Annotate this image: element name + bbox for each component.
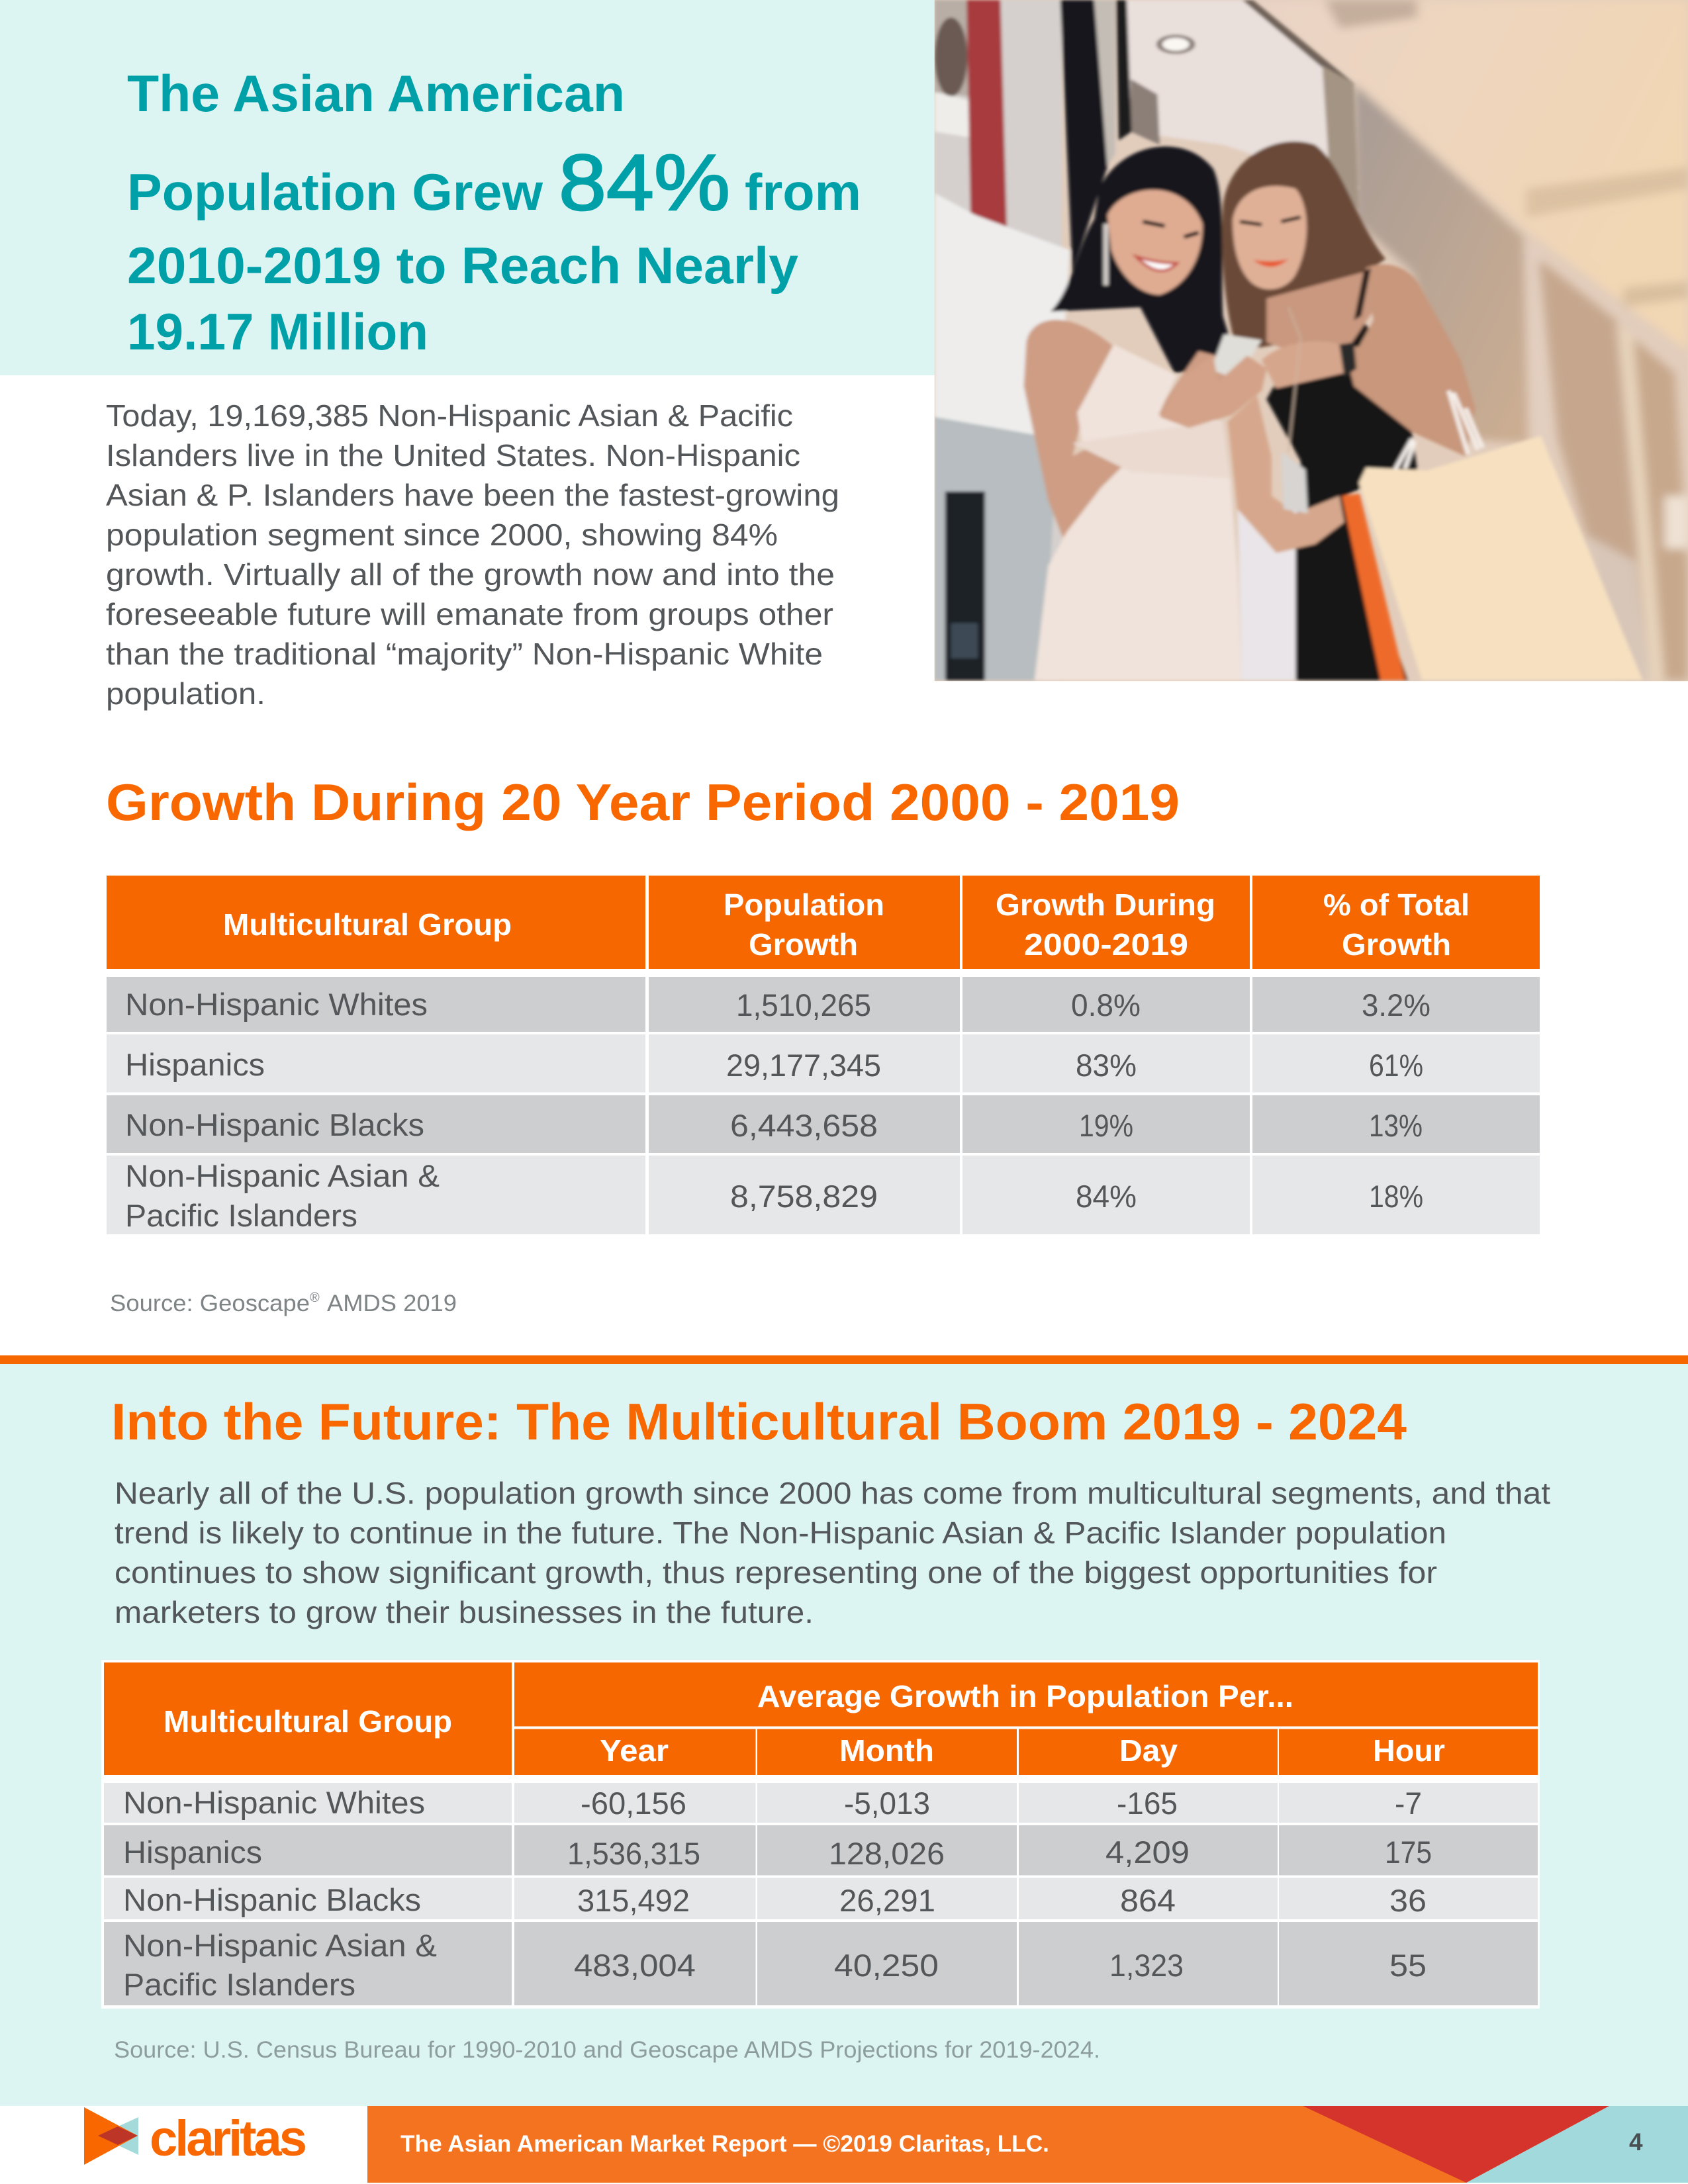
right woman shoulder and arm [1344, 264, 1476, 457]
intro paragraph: population segment since 2000, showing 84% [106, 518, 778, 552]
row: Hispanics [107, 1034, 1540, 1092]
row: Non-Hispanic Whites: 3.2% [1362, 987, 1430, 1023]
title: 19.17 Million [127, 302, 428, 361]
row: Non-Hispanic Blacks: 26,291 [839, 1883, 935, 1918]
row: Hispanics: 1,536,315 [567, 1836, 700, 1871]
table header: Day [1119, 1733, 1178, 1768]
row: Hispanics: 29,177,345 [726, 1048, 881, 1083]
row: Non-Hispanic Asian and Pacific Islanders: Non-Hispanic Asian & [125, 1158, 440, 1193]
paragraph: multicultural growth: continues to show significant growth, thus representing one of the biggest opportunities for [115, 1555, 1437, 1590]
table header: Average Growth in Population Per... [757, 1679, 1293, 1713]
title [127, 64, 861, 361]
row: Non-Hispanic Asian and Pacific Islanders: Pacific Islanders [123, 1967, 355, 2002]
table: average growth per period [101, 1660, 1540, 2009]
row: Hispanics: 175 [1385, 1835, 1432, 1870]
row: Non-Hispanic Whites: 0.8% [1071, 987, 1141, 1023]
title: The Asian American [127, 64, 625, 122]
table header: Multicultural Group [164, 1704, 452, 1739]
table header row: Growth [1342, 927, 1451, 962]
heading: growth during 20 year period: Growth During 20 Year Period 2000 - 2019 [106, 773, 1180, 831]
logo wordmark: claritas [150, 2111, 307, 2167]
right woman fist [1262, 341, 1344, 388]
row: Non-Hispanic Asian and Pacific Islanders: 84% [1076, 1179, 1137, 1214]
row: Non-Hispanic Asian and Pacific Islanders: 8,758,829 [730, 1179, 878, 1214]
table header: Year [600, 1733, 669, 1768]
intro paragraph: Asian & P. Islanders have been the fastest-growing [106, 478, 839, 512]
footer [0, 2106, 1688, 2184]
left woman arm and shoulder [1022, 318, 1226, 537]
table header row: Growth [749, 927, 858, 962]
intro paragraph: population. [106, 676, 265, 711]
source note: Geoscape: AMDS 2019 [327, 1291, 457, 1316]
row: Non-Hispanic Asian and Pacific Islanders: 483,004 [574, 1948, 696, 1983]
row: Non-Hispanic Blacks: 36 [1389, 1883, 1427, 1918]
title: Population Grew [127, 163, 543, 221]
footer bar [367, 2106, 1688, 2183]
table: growth 2000-2019 [107, 876, 1540, 1234]
row: Non-Hispanic Asian and Pacific Islanders: Pacific Islanders [125, 1198, 357, 1233]
bags [1342, 494, 1405, 680]
paragraph: multicultural growth: marketers to grow their businesses in the future. [115, 1595, 814, 1629]
phone [1211, 334, 1262, 380]
row: Non-Hispanic Blacks: 13% [1369, 1108, 1423, 1143]
table header: Month [839, 1733, 934, 1768]
left woman second arm [1228, 395, 1344, 553]
source note: Geoscape: ® [310, 1291, 320, 1305]
row: Non-Hispanic Asian and Pacific Islanders: 18% [1369, 1179, 1423, 1214]
row: Non-Hispanic Whites: -5,013 [844, 1786, 930, 1821]
intro paragraph: foreseeable future will emanate from groups other [106, 597, 833, 631]
row: Non-Hispanic Whites [107, 977, 1540, 1032]
row: Non-Hispanic Asian and Pacific Islanders [104, 1922, 1538, 2005]
row: Hispanics [104, 1825, 1538, 1876]
photo: two women shopping looking at a phone [927, 0, 1688, 688]
row: Non-Hispanic Blacks: 315,492 [577, 1883, 690, 1918]
intro paragraph: growth. Virtually all of the growth now and into the [106, 557, 835, 592]
row: Hispanics: Hispanics [123, 1835, 262, 1870]
row: Non-Hispanic Asian and Pacific Islanders: 55 [1389, 1948, 1427, 1983]
row: Non-Hispanic Asian and Pacific Islanders [107, 1156, 1540, 1234]
left woman hair [1051, 146, 1237, 373]
row: Hispanics: 128,026 [829, 1836, 945, 1871]
row: Non-Hispanic Blacks: Non-Hispanic Blacks [123, 1882, 421, 1917]
table header row: % of Total [1323, 887, 1470, 922]
row: Non-Hispanic Blacks: 6,443,658 [730, 1108, 878, 1143]
intro paragraph: Today, 19,169,385 Non-Hispanic Asian & Pacific [106, 398, 793, 433]
icon: Claritas logo mark [84, 2107, 138, 2165]
source note: Geoscape: Source: Geoscape [110, 1291, 310, 1316]
left woman face [1107, 190, 1203, 295]
table header [104, 1662, 1538, 1775]
page number: 4 [1629, 2128, 1643, 2156]
row: Hispanics: 4,209 [1105, 1835, 1190, 1870]
row: Non-Hispanic Whites: -60,156 [581, 1786, 686, 1821]
intro paragraph: than the traditional “majority” Non-Hispanic White [106, 637, 823, 671]
table header row [107, 876, 1540, 969]
right woman face [1233, 186, 1307, 289]
footer text: The Asian American Market Report — ©2019 Claritas, LLC. [400, 2131, 1049, 2157]
dress left woman [1035, 345, 1241, 680]
table header row: Growth During [996, 887, 1215, 922]
row: Non-Hispanic Blacks [104, 1878, 1538, 1919]
row: Non-Hispanic Blacks: Non-Hispanic Blacks [125, 1107, 424, 1142]
row: Non-Hispanic Whites [104, 1783, 1538, 1823]
title: from [745, 163, 861, 221]
row: Non-Hispanic Blacks: 864 [1120, 1883, 1176, 1918]
intro paragraph: Islanders live in the United States. Non-Hispanic [106, 438, 800, 473]
row: Non-Hispanic Asian and Pacific Islanders: Non-Hispanic Asian & [123, 1928, 437, 1963]
row: Hispanics: 83% [1076, 1048, 1137, 1083]
paragraph: multicultural growth [115, 1476, 1550, 1629]
paragraph: multicultural growth: Nearly all of the U.S. population growth since 2000 has come from multicultural segments, and that [115, 1476, 1550, 1510]
table header row: 2000-2019 [1024, 927, 1188, 962]
right woman hair [1222, 142, 1385, 351]
table header row: Multicultural Group [223, 907, 512, 942]
paragraph: multicultural growth: trend is likely to continue in the future. The Non-Hispanic Asian & Pacific Islander population [115, 1516, 1446, 1550]
row: Non-Hispanic Asian and Pacific Islanders: 1,323 [1109, 1948, 1184, 1983]
table header: Hour [1373, 1733, 1445, 1768]
row: Hispanics: Hispanics [125, 1047, 265, 1082]
table header row: Population [724, 887, 884, 922]
row: Non-Hispanic Blacks: 19% [1079, 1108, 1133, 1143]
row: Non-Hispanic Whites: -165 [1117, 1786, 1178, 1821]
title: 84% [559, 138, 730, 227]
panel: into the future [0, 1355, 1688, 2106]
row: Non-Hispanic Whites: Non-Hispanic Whites [125, 987, 428, 1022]
source note: Census Bureau: Source: U.S. Census Bureau for 1990-2010 and Geoscape AMDS Projections for 2019-2024. [114, 2037, 1100, 2063]
row: Non-Hispanic Blacks [107, 1095, 1540, 1153]
panel: title block [0, 0, 935, 375]
store interior [1237, 496, 1303, 680]
intro paragraph [106, 398, 839, 711]
row: Non-Hispanic Asian and Pacific Islanders: 40,250 [834, 1948, 939, 1983]
row: Non-Hispanic Whites: Non-Hispanic Whites [123, 1785, 425, 1820]
right woman black dress [1266, 316, 1417, 680]
row: Non-Hispanic Whites: -7 [1395, 1786, 1422, 1821]
heading: into the future: Into the Future: The Multicultural Boom 2019 - 2024 [111, 1392, 1407, 1451]
title: 2010-2019 to Reach Nearly [127, 236, 798, 295]
right woman chest [1266, 272, 1376, 351]
row: Non-Hispanic Whites: 1,510,265 [736, 987, 871, 1023]
row: Hispanics: 61% [1369, 1048, 1423, 1083]
source note: Geoscape [110, 1291, 457, 1316]
